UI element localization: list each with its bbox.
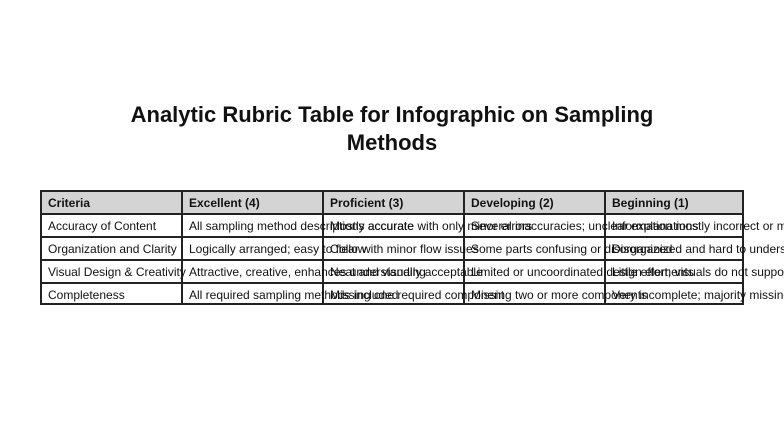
rubric table: Several inaccuracies; unclear explanations [471,219,698,233]
rubric table: Missing two or more components [471,288,647,302]
rubric table: Some parts confusing or disorganized [471,242,672,256]
rubric table: Missing one required component [330,288,504,302]
rubric table: Limited or uncoordinated design elements [471,265,694,279]
rubric table: Accuracy of Content [48,219,156,233]
rubric table: Proficient (3) [330,196,403,210]
title: Analytic Rubric Table for Infographic on Sampling [131,102,653,127]
rubric table: All sampling method descriptions accurate [189,219,414,233]
rubric table: Organization and Clarity [48,242,177,256]
rubric table: Clear with minor flow issues [330,242,479,256]
rubric table [40,190,744,305]
rubric table: Completeness [48,288,125,302]
title [131,102,653,155]
rubric table: Logically arranged; easy to follow [189,242,366,256]
rubric table: Mostly accurate with only minor errors [330,219,532,233]
rubric table: Excellent (4) [189,196,260,210]
rubric table: Visual Design & Creativity [48,265,186,279]
rubric table: Developing (2) [471,196,554,210]
title: Methods [347,130,437,155]
rubric table: Attractive, creative, enhances understanding [189,265,426,279]
rubric table: Neat and visually acceptable [330,265,483,279]
rubric table: All required sampling methods included [189,288,398,302]
rubric table: Criteria [48,196,90,210]
rubric table: Beginning (1) [612,196,689,210]
header row [42,192,742,213]
